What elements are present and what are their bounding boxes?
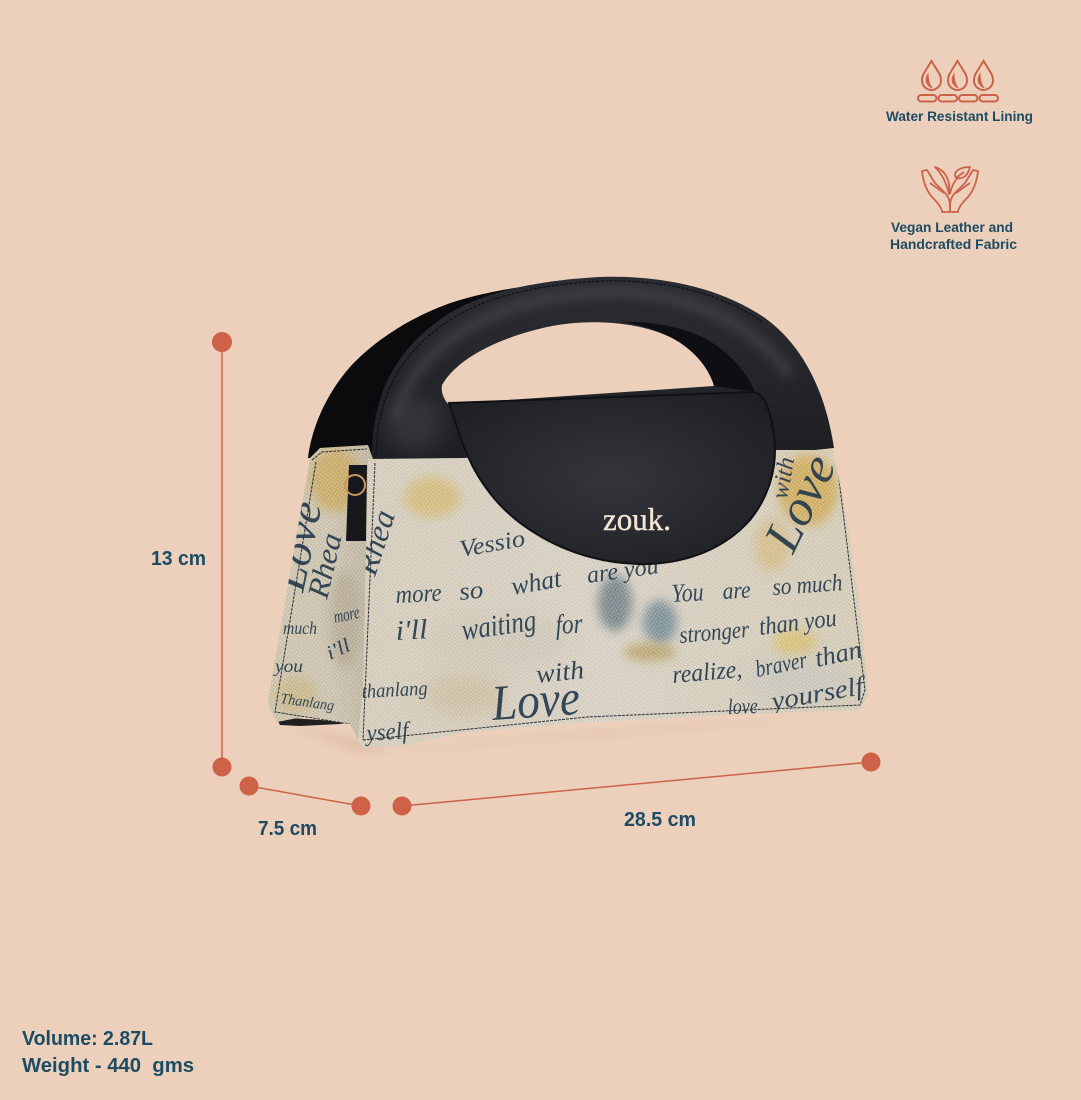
side panel fabric: much <box>283 618 317 638</box>
front panel fabric: thanlang <box>361 678 428 703</box>
feature: water resistant lining: Water Resistant Lining <box>886 109 1033 124</box>
side panel fabric: you <box>273 656 303 676</box>
front panel fabric: love <box>727 693 758 719</box>
front panel fabric: stronger <box>678 617 751 649</box>
feature: vegan leather and handcrafted fabric: Vegan Leather and <box>891 220 1013 235</box>
flap with logo <box>449 392 775 564</box>
side panel fabric <box>268 445 373 740</box>
front panel fabric: so <box>458 577 484 606</box>
height dimension: 13 cm <box>151 332 232 776</box>
volume and weight note <box>22 1028 194 1077</box>
side panel fabric: Love <box>265 497 331 596</box>
side panel fabric: i'll <box>323 634 354 665</box>
stitching <box>363 463 865 740</box>
front panel fabric: what <box>509 564 564 601</box>
strap ring <box>345 465 367 541</box>
zouk logo: zouk. <box>603 501 671 537</box>
front panel fabric: are <box>722 578 752 605</box>
front panel fabric: yself <box>364 718 412 747</box>
front panel fabric: yourself <box>766 670 870 716</box>
front panel fabric: with <box>535 655 585 689</box>
front panel fabric: Love <box>489 669 582 731</box>
front panel fabric: waiting <box>459 604 538 647</box>
handle highlight <box>395 292 790 420</box>
handwriting print: Vessio <box>458 526 527 563</box>
underside shadow of side panel <box>276 717 350 726</box>
front panel fabric: braver <box>753 647 810 683</box>
depth dimension: 7.5 cm: 7.5 cm <box>258 818 317 840</box>
front handle with cut-out <box>372 277 834 460</box>
side panel fabric: Thanlang <box>279 691 336 715</box>
feature: vegan leather and handcrafted fabric: Handcrafted Fabric <box>890 237 1018 252</box>
height dimension: 13 cm: 13 cm <box>151 548 206 570</box>
feature: vegan leather and handcrafted fabric <box>890 167 1018 252</box>
front panel fabric: with <box>767 455 800 501</box>
front panel fabric: than <box>812 635 864 673</box>
feature: water resistant lining <box>886 61 1033 124</box>
front panel fabric: Rhea <box>347 505 402 580</box>
front panel fabric: realize, <box>671 656 743 689</box>
width dimension: 28.5 cm <box>392 752 880 831</box>
front panel fabric: for <box>555 609 583 641</box>
front panel fabric: You <box>671 577 704 608</box>
volume and weight note: Volume: 2.87L <box>22 1028 153 1050</box>
front panel fabric: Love <box>752 445 847 561</box>
lower-left handle shine <box>387 397 443 453</box>
handle stitching <box>376 281 762 456</box>
bag shadow <box>285 716 860 752</box>
front panel fabric: are you <box>585 553 660 589</box>
icon: three water drops over pills <box>918 61 998 102</box>
front panel fabric: i'll <box>395 614 429 647</box>
volume and weight note: Weight - 440 gms <box>22 1055 194 1077</box>
front panel fabric: than you <box>757 605 838 641</box>
icon: hands holding a leaf <box>922 167 978 212</box>
front panel fabric: so much <box>772 570 843 601</box>
front panel fabric <box>347 440 875 755</box>
side panel fabric: more <box>332 602 361 627</box>
handbag illustration <box>260 277 875 755</box>
side panel fabric: Rhea <box>301 530 349 603</box>
back handle <box>308 277 600 462</box>
depth dimension: 7.5 cm <box>240 776 370 840</box>
yellow and blue print blotches <box>778 454 838 526</box>
width dimension: 28.5 cm: 28.5 cm <box>624 809 696 831</box>
inner right of handle <box>620 322 755 392</box>
front panel fabric: more <box>395 580 442 609</box>
